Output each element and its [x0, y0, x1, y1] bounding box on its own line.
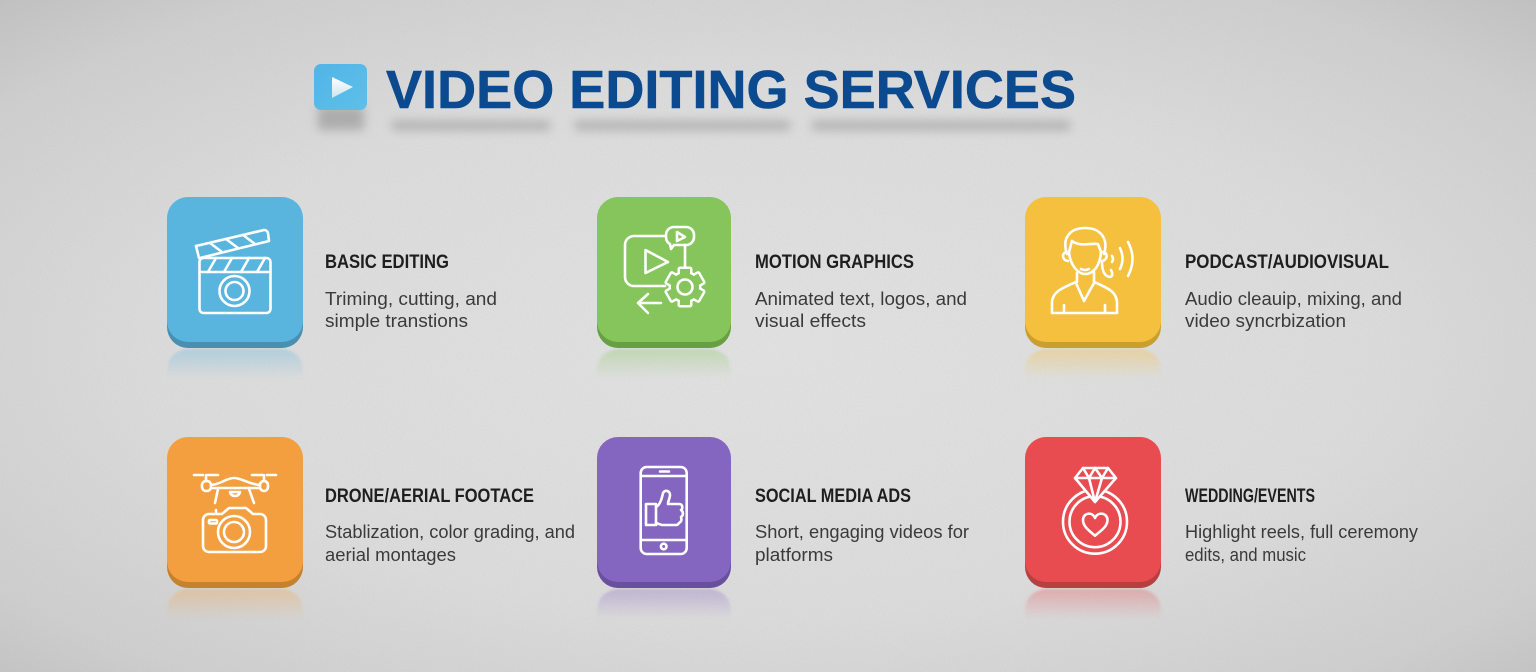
- icon: person with headset: [1052, 228, 1132, 313]
- tile: podcast: [1025, 197, 1161, 379]
- tile: drone: [167, 437, 303, 619]
- text: basic editing: simple transtions: [325, 310, 468, 331]
- text: basic editing: [325, 251, 497, 331]
- text: wedding: WEDDING/EVENTS: [1185, 485, 1315, 507]
- panel: basic editing: [167, 197, 497, 379]
- panel: social media ads: [597, 437, 969, 619]
- text: drone: DRONE/AERIAL FOOTACE: [325, 485, 534, 507]
- icon: title play button: [314, 64, 367, 130]
- tile: wedding: [1025, 437, 1161, 619]
- tile: basic editing: [167, 197, 303, 379]
- title shadow: [392, 121, 1070, 130]
- panel: podcast: [1025, 197, 1402, 379]
- tile: social media ads: [597, 437, 731, 619]
- tile: motion graphics: [597, 197, 731, 379]
- text: podcast: video syncrbization: [1185, 310, 1346, 331]
- text: drone: aerial montages: [325, 544, 456, 565]
- text: social media ads: SOCIAL MEDIA ADS: [755, 485, 911, 507]
- text: motion graphics: Animated text, logos, and: [755, 288, 967, 309]
- panel: motion graphics: [597, 197, 967, 379]
- text: social media ads: platforms: [755, 544, 833, 565]
- icon: drone and camera: [194, 475, 276, 552]
- icon: motion gear and play: [625, 227, 703, 313]
- text: basic editing: BASIC EDITING: [325, 251, 449, 273]
- text: podcast: Audio cleauip, mixing, and: [1185, 288, 1402, 309]
- text: motion graphics: MOTION GRAPHICS: [755, 251, 914, 273]
- text: drone: [325, 485, 575, 565]
- text: wedding: [1185, 485, 1419, 565]
- text: wedding: Highlight reels, full ceremony: [1185, 521, 1419, 542]
- text: podcast: [1185, 251, 1402, 331]
- text: motion graphics: [755, 251, 967, 331]
- text: social media ads: Short, engaging videos for: [755, 521, 969, 542]
- text: motion graphics: visual effects: [755, 310, 866, 331]
- title: VIDEO EDITING SERVICES: [386, 60, 1076, 120]
- text: podcast: PODCAST/AUDIOVISUAL: [1185, 251, 1389, 273]
- text: social media ads: [755, 485, 969, 565]
- icon: clapperboard: [196, 230, 270, 313]
- text: wedding: edits, and music: [1185, 544, 1306, 565]
- icon: diamond ring with heart: [1063, 468, 1127, 554]
- panel: drone: [167, 437, 575, 619]
- icon: phone with thumbs up: [641, 467, 687, 554]
- text: basic editing: Triming, cutting, and: [325, 288, 497, 309]
- text: drone: Stablization, color grading, and: [325, 521, 575, 542]
- panel: wedding: [1025, 437, 1419, 619]
